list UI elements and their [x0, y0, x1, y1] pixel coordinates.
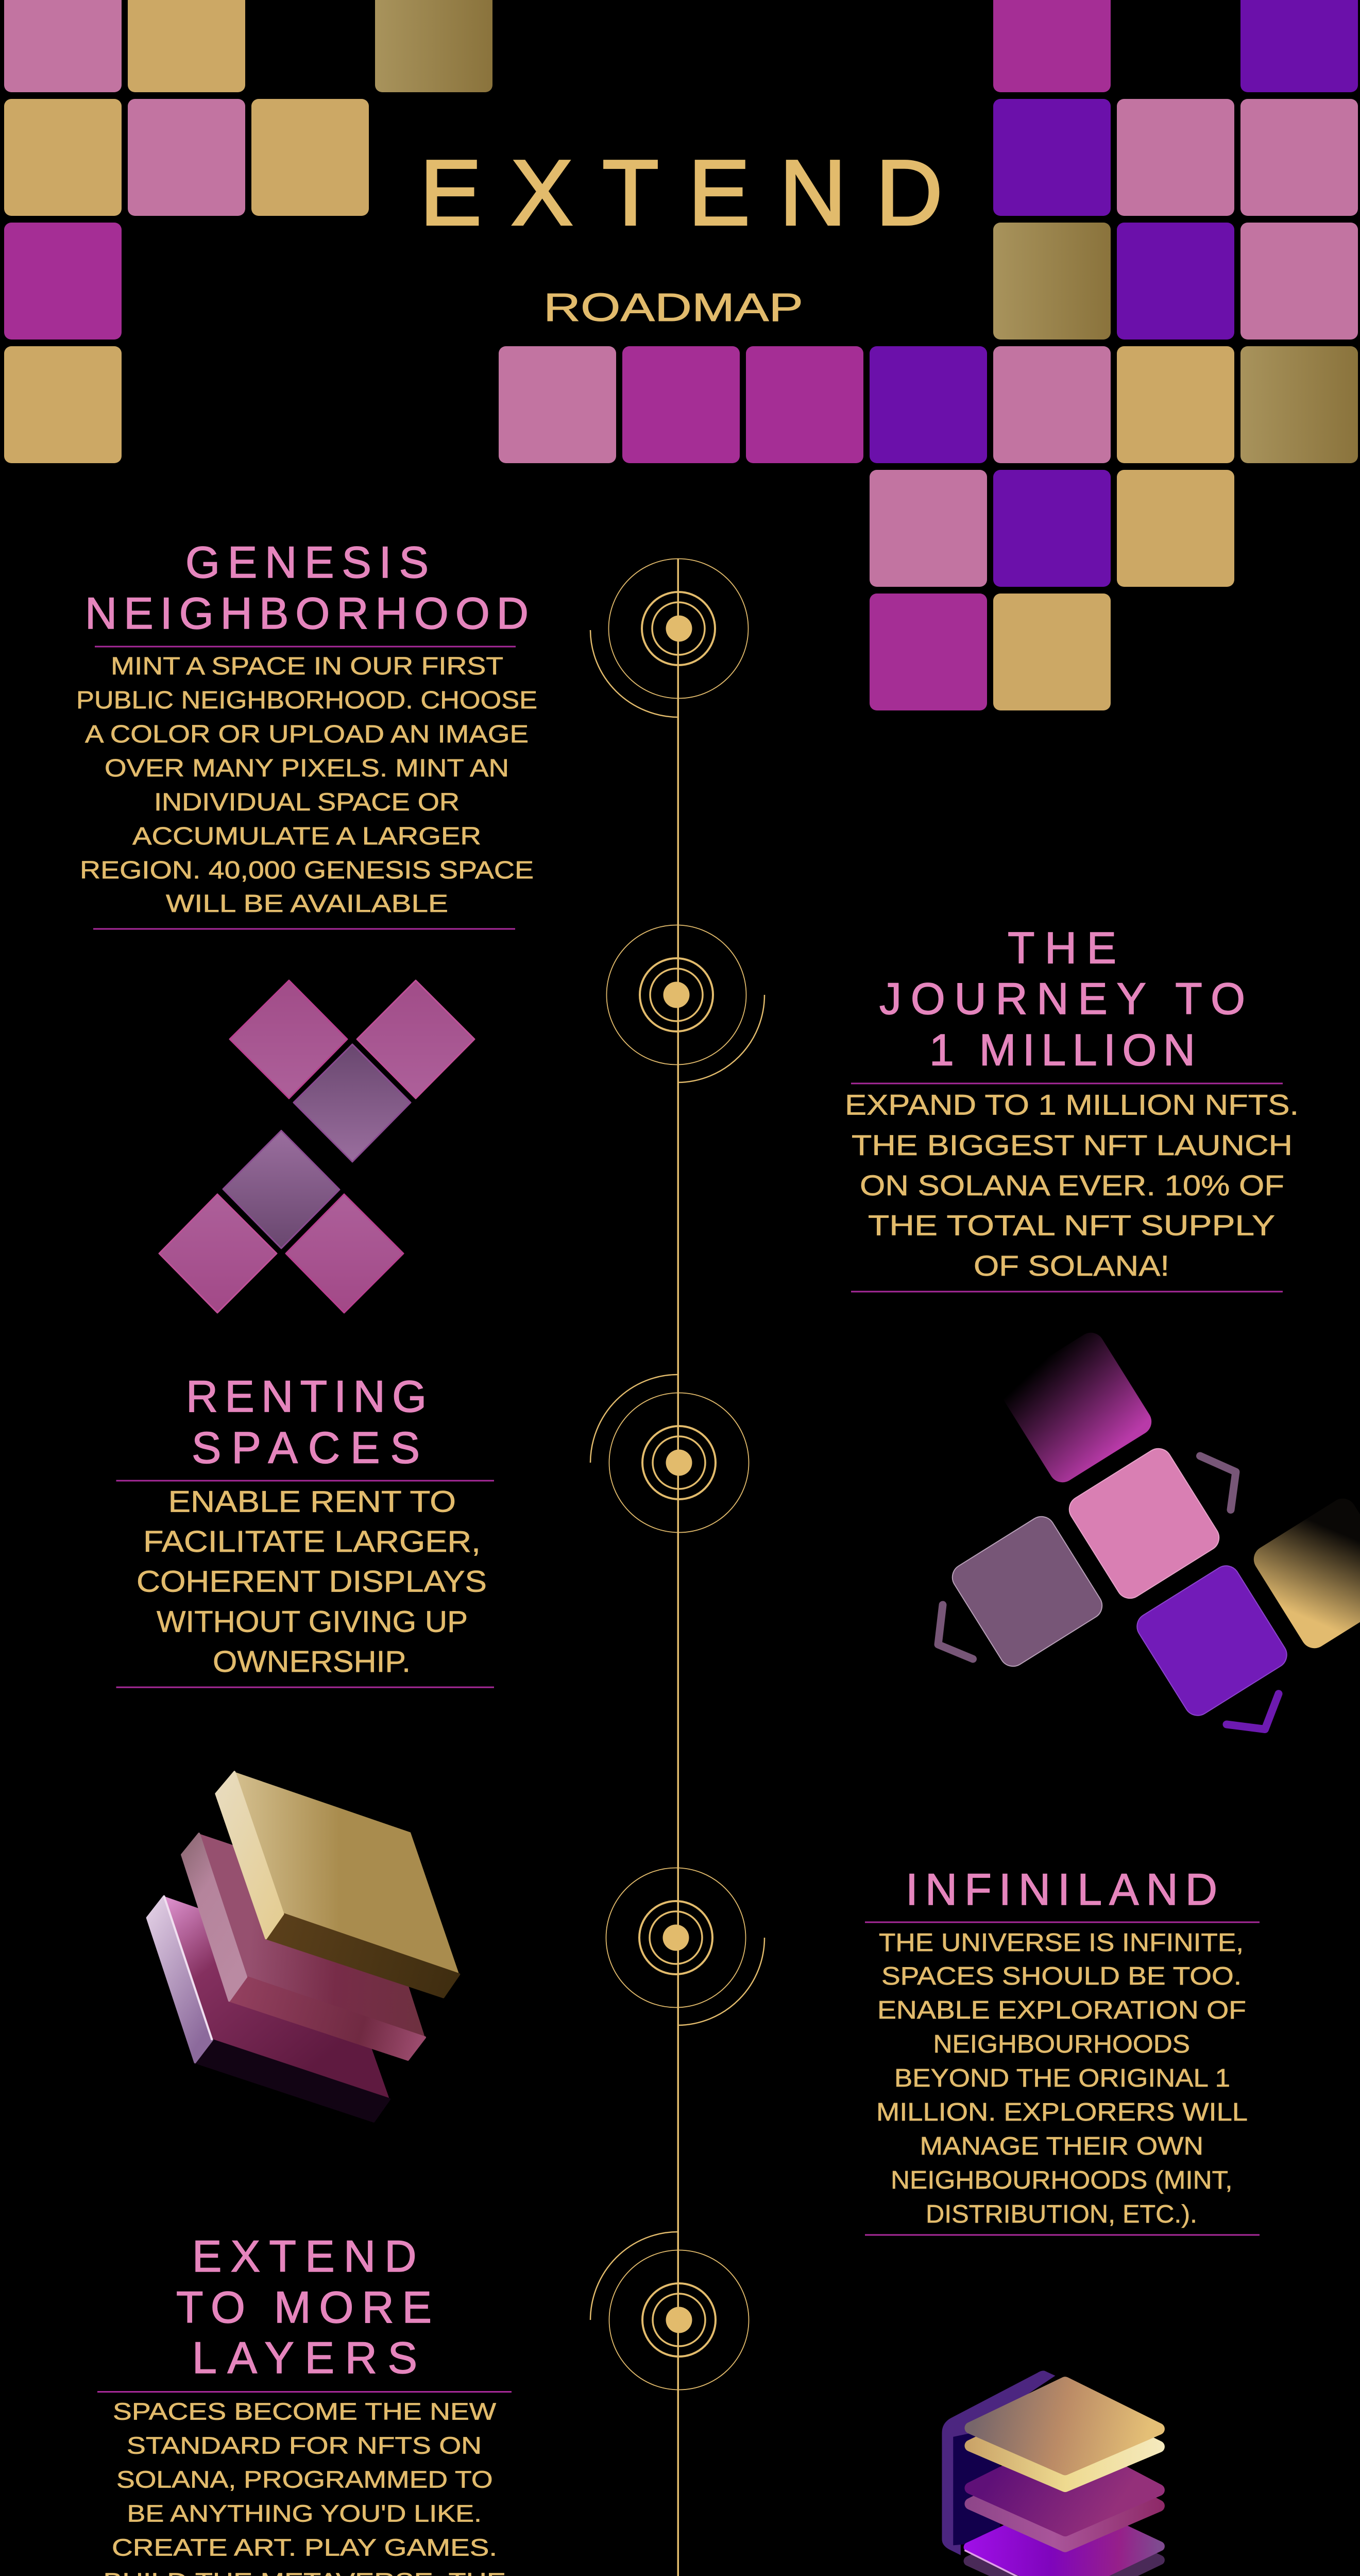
heading: genesis neighborhood: NEIGHBORHOOD — [85, 589, 529, 638]
timeline node 3 — [590, 1375, 749, 1532]
title: EXTEND — [420, 141, 943, 245]
heading: extend to more layers — [176, 2232, 432, 2383]
block: gold — [216, 1772, 459, 1997]
body text: genesis neighborhood: MINT A SPACE IN OUR FIRST — [111, 653, 503, 680]
body text: infiniland — [876, 1929, 1248, 2228]
chevron: lower left — [938, 1605, 973, 1659]
heading: the journey to 1 million: JOURNEY TO — [879, 974, 1245, 1024]
body text: infiniland: SPACES SHOULD BE TOO. — [881, 1962, 1242, 1990]
body text: renting spaces: ENABLE RENT TO — [168, 1485, 456, 1519]
heading: extend to more layers: TO MORE — [176, 2283, 432, 2332]
body text: genesis neighborhood — [76, 653, 537, 918]
body text: genesis neighborhood: ACCUMULATE A LARGER — [132, 823, 481, 850]
body text: the journey to 1 million: THE TOTAL NFT SUPPLY — [868, 1209, 1275, 1242]
heading: genesis neighborhood — [85, 538, 529, 638]
heading: extend to more layers: EXTEND — [192, 2232, 416, 2281]
slab: top — [971, 2383, 1159, 2486]
body text: genesis neighborhood: OVER MANY PIXELS. MINT AN — [105, 755, 509, 782]
body text: infiniland: ENABLE EXPLORATION OF — [877, 1996, 1246, 2024]
slab: middle — [971, 2441, 1159, 2546]
body text: infiniland: NEIGHBOURHOODS — [933, 2030, 1190, 2058]
panel: infiniland — [865, 1865, 1260, 2236]
heading: extend to more layers: LAYERS — [192, 2333, 417, 2383]
body text: genesis neighborhood: WILL BE AVAILABLE — [166, 890, 448, 918]
block: purple — [147, 1896, 389, 2122]
chevron: upper right — [1200, 1456, 1236, 1510]
body text: renting spaces: OWNERSHIP. — [213, 1645, 411, 1679]
body text: infiniland: MILLION. EXPLORERS WILL — [876, 2098, 1248, 2126]
timeline node 2 — [607, 925, 764, 1082]
panel: renting spaces — [116, 1372, 494, 1688]
chevron: lower right — [1227, 1694, 1279, 1729]
block: pink — [182, 1834, 425, 2060]
body text: the journey to 1 million: OF SOLANA! — [974, 1249, 1169, 1282]
body text: extend to more layers: BE ANYTHING YOU'D LIKE. — [127, 2500, 482, 2527]
body text: genesis neighborhood: PUBLIC NEIGHBORHOOD. CHOOSE — [76, 687, 537, 714]
heading: renting spaces: RENTING — [186, 1372, 427, 1421]
timeline node 4 — [606, 1868, 764, 2025]
body text: the journey to 1 million: EXPAND TO 1 MILLION NFTS. — [845, 1088, 1299, 1121]
timeline node 5 — [590, 2232, 749, 2389]
body text: the journey to 1 million — [845, 1088, 1299, 1282]
heading: the journey to 1 million: 1 MILLION — [929, 1025, 1195, 1075]
timeline node 1 — [590, 558, 748, 717]
panel: the journey to 1 million — [845, 923, 1299, 1292]
body text: renting spaces — [137, 1485, 487, 1679]
body text: extend to more layers: SPACES BECOME THE NEW — [113, 2398, 496, 2425]
panel: extend to more layers — [97, 2232, 512, 2576]
body text: extend to more layers: STANDARD FOR NFTS ON — [127, 2432, 482, 2459]
body text: extend to more layers — [103, 2398, 506, 2576]
body text: the journey to 1 million: ON SOLANA EVER. 10% OF — [860, 1169, 1284, 1201]
decorative tile grid — [4, 0, 1358, 710]
body text: extend to more layers: SOLANA, PROGRAMMED TO — [116, 2466, 492, 2493]
timeline line — [677, 559, 679, 2576]
panel: genesis neighborhood — [76, 538, 537, 929]
body text: genesis neighborhood: INDIVIDUAL SPACE OR — [154, 789, 460, 816]
icon: pink diamond tiles — [159, 980, 474, 1313]
icon: stacked 3d blocks — [147, 1772, 459, 2122]
body text: renting spaces: FACILITATE LARGER, — [143, 1525, 481, 1558]
heading: renting spaces — [186, 1372, 427, 1472]
body text: infiniland: DISTRIBUTION, ETC.). — [926, 2200, 1197, 2228]
body text: renting spaces: COHERENT DISPLAYS — [137, 1565, 487, 1598]
body text: genesis neighborhood: A COLOR OR UPLOAD AN IMAGE — [85, 721, 529, 748]
body text: genesis neighborhood: REGION. 40,000 GENESIS SPACE — [80, 857, 534, 884]
heading: the journey to 1 million — [879, 923, 1245, 1075]
icon: layered slabs — [942, 2370, 1160, 2576]
body text: renting spaces: WITHOUT GIVING UP — [157, 1605, 468, 1638]
icon: rotated colour tiles — [938, 1328, 1360, 1729]
heading: genesis neighborhood: GENESIS — [185, 538, 429, 587]
body text: infiniland: THE UNIVERSE IS INFINITE, — [879, 1929, 1244, 1957]
heading: infiniland: INFINILAND — [906, 1865, 1217, 1914]
body text: extend to more layers: CREATE ART. PLAY GAMES. — [112, 2534, 497, 2561]
back panel — [942, 2370, 1056, 2555]
subtitle: ROADMAP — [543, 285, 803, 330]
body text: infiniland: MANAGE THEIR OWN — [920, 2132, 1203, 2160]
heading: the journey to 1 million: THE — [1008, 923, 1116, 973]
body text: infiniland: NEIGHBOURHOODS (MINT, — [891, 2166, 1232, 2194]
body text: the journey to 1 million: THE BIGGEST NFT LAUNCH — [852, 1129, 1293, 1161]
slab: bottom — [964, 2502, 1160, 2576]
heading: renting spaces: SPACES — [192, 1423, 420, 1472]
body text: infiniland: BEYOND THE ORIGINAL 1 — [894, 2064, 1230, 2092]
